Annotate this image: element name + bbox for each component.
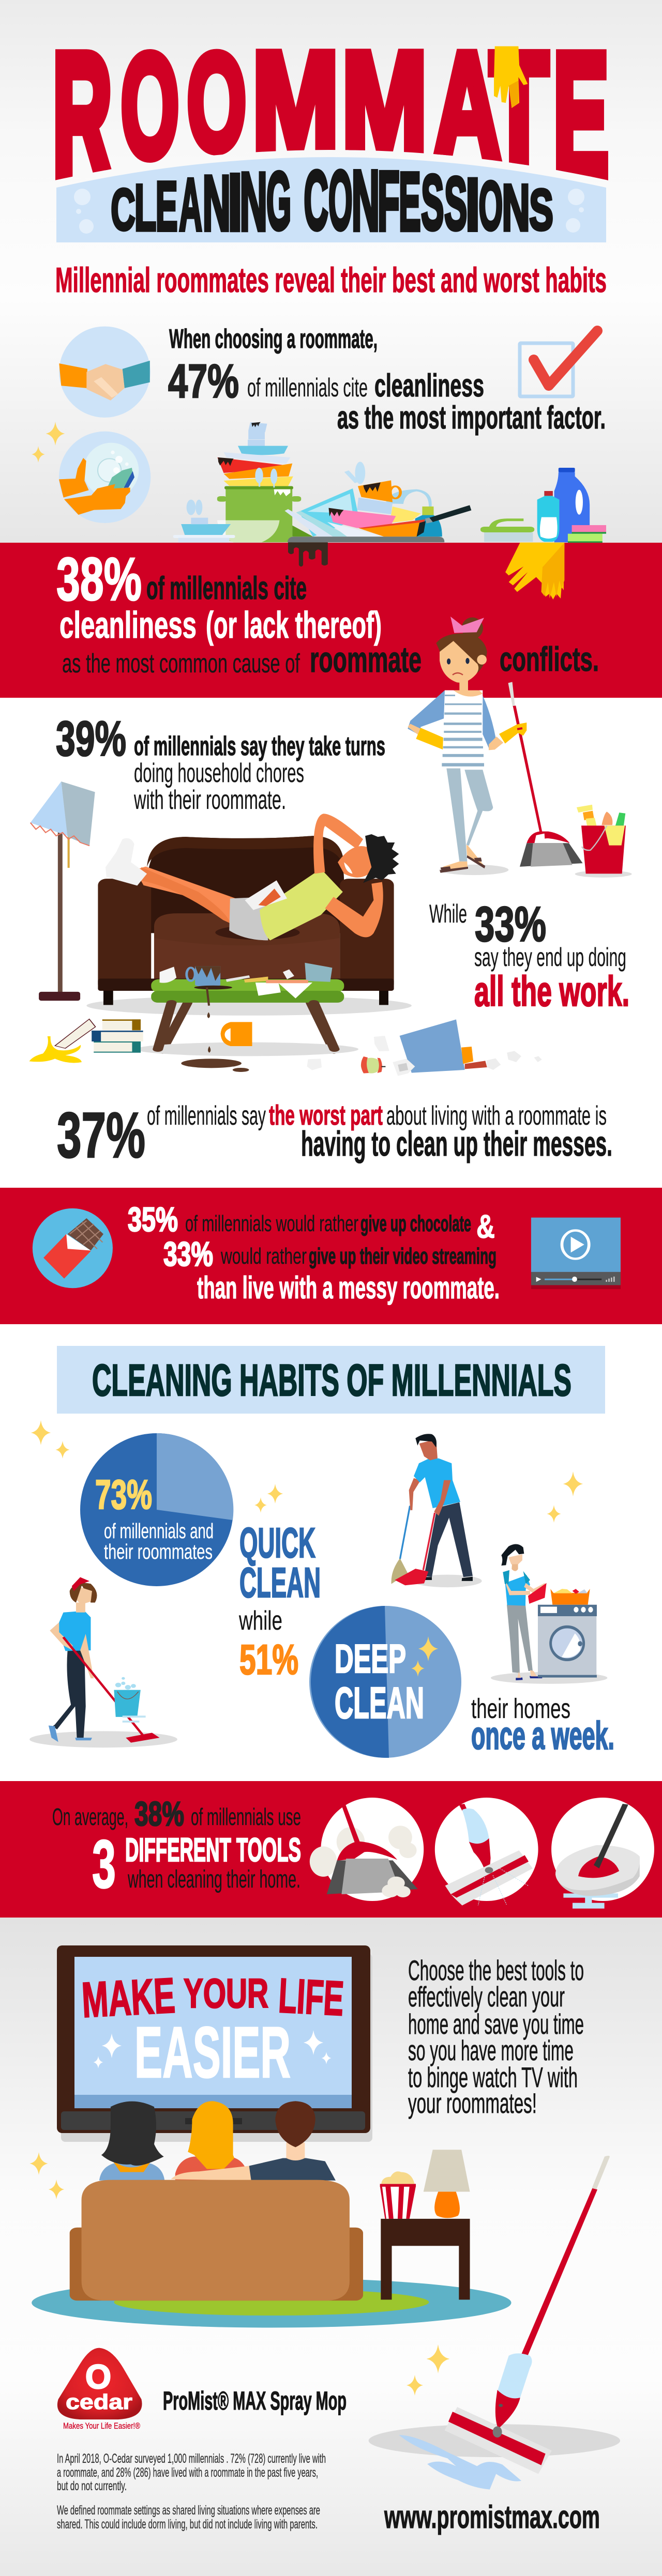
text: 3 different tools [52, 1795, 301, 1902]
text: give up chocolate: & [476, 1208, 495, 1245]
text: survey methodology: shared. This could include dorm living, but did not include living with parents. [57, 2517, 318, 2532]
text: 38% of millennials: (or lack thereof) [206, 605, 382, 646]
text: survey methodology: We defined roommate settings as shared living situations where expenses are [57, 2503, 320, 2518]
text: 37% worst part [57, 1100, 612, 1171]
icon: drip on band [288, 542, 328, 566]
illustration: annoyed woman with broom and bucket [408, 617, 632, 878]
illustration: dirty dishes pile [173, 422, 606, 543]
text: 39% take turns: doing household chores [134, 758, 304, 788]
illustration: floor lamp [31, 781, 95, 1001]
title: CLEANING CONFESSIONS: N [352, 154, 380, 249]
text: 38% of millennials: cleanliness [59, 605, 197, 646]
text: survey methodology: but do not currently. [57, 2479, 127, 2493]
title: CLEANING CONFESSIONS: N [240, 156, 267, 248]
pie chart: 73% quick clean: 73% [95, 1471, 152, 1517]
red band: chocolate and video [0, 1188, 662, 1324]
text: choose the best tools: your roommates! [408, 2087, 537, 2119]
text: choose the best tools [408, 1954, 584, 2119]
title: CLEANING CONFESSIONS: L [134, 171, 156, 244]
text: when choosing a roommate [168, 324, 606, 436]
text: 39% take turns [56, 711, 385, 815]
text: product name: ProMist® MAX Spray Mop [163, 2386, 347, 2415]
text: 39% take turns: of millennials say they take turns [134, 731, 385, 761]
text: 38% of millennials: roommate [310, 639, 422, 680]
text: survey methodology [57, 2451, 326, 2532]
red band: 3 different tools [0, 1781, 662, 1918]
icon: handshake circle [59, 326, 151, 418]
text: 38% of millennials [56, 545, 599, 680]
illustration: spray mop [369, 2156, 620, 2490]
sparkles: TV [93, 2030, 332, 2068]
icon: chocolate bar [33, 1208, 113, 1288]
illustration: TV with message [57, 1945, 372, 2142]
text: 39% take turns: 39% [56, 711, 126, 766]
heading: easier: EASIER [134, 2012, 291, 2093]
icon: broom circle [310, 1798, 424, 1901]
text: 38% of millennials: conflicts. [500, 640, 599, 678]
title: CLEANING CONFESSIONS: F [378, 154, 400, 248]
title: CLEANING CONFESSIONS: C [111, 177, 136, 242]
background: bottom section [0, 1918, 662, 2576]
icon: yellow glove hanging [505, 543, 564, 600]
background: middle white section [0, 698, 662, 1918]
text: 3 different tools: of millennials use [191, 1803, 301, 1830]
sparkles: dishes [32, 422, 65, 463]
red band: 38% conflicts [0, 543, 662, 698]
text: while 33% all the work [429, 897, 629, 1015]
heading: make your life: LIFE [277, 1968, 345, 2026]
illustration: mess on floor [29, 1003, 542, 1076]
icon: dish washing circle [59, 432, 151, 523]
icon: yellow glove on title [494, 47, 528, 108]
logo: O-Cedar: Makes Your Life Easier!® [63, 2421, 140, 2431]
text: 3 different tools: On average, [52, 1803, 128, 1830]
text: give up chocolate: 35% [128, 1200, 178, 1238]
background: top section [0, 0, 662, 543]
circle: deep clean: CLEAN [335, 1679, 424, 1728]
text: while 33% all the work: While [429, 899, 467, 928]
icon: spray mop circle [435, 1798, 538, 1906]
text: 37% worst part: the worst part [269, 1100, 383, 1131]
title: ROOMMATE: M [342, 23, 427, 180]
text: give up chocolate: 33% [163, 1235, 213, 1273]
title: ROOMMATE: A [433, 21, 501, 191]
text: 37% worst part: of millennials say [147, 1101, 266, 1131]
illustration: man sweeping [392, 1434, 482, 1587]
icon: red check mark in box [520, 331, 597, 396]
text: quick clean while 51%: CLEAN [239, 1559, 321, 1606]
icon: spin mop bucket circle [551, 1798, 654, 1909]
text: when choosing a roommate: cleanliness [374, 368, 484, 404]
title: CLEANING CONFESSIONS: S [421, 159, 444, 246]
pie chart: 73% quick clean [80, 1433, 233, 1586]
title: CLEANING CONFESSIONS: S [444, 162, 467, 246]
title: ROOMMATE: O [121, 24, 179, 188]
title: ROOMMATE: R [53, 18, 112, 214]
text: 39% take turns: with their roommate. [133, 785, 286, 815]
sparkles: habits [31, 1420, 583, 1523]
text: 38% of millennials: 38% [56, 545, 142, 614]
title: CLEANING CONFESSIONS: O [328, 154, 353, 247]
illustration: roommates on sofa [32, 2101, 511, 2328]
logo: O-Cedar [57, 2348, 142, 2431]
text: survey methodology: In April 2018, O-Cedar surveyed 1,000 millennials . 72% (728) currently live with [57, 2451, 326, 2466]
text: give up chocolate: give up their video streaming [309, 1244, 496, 1269]
icon: video player [531, 1218, 621, 1289]
text: quick clean while 51% [238, 1520, 321, 1683]
text: quick clean while 51%: while [238, 1606, 282, 1636]
title: ROOMMATE: M [252, 24, 339, 179]
title: CLEANING CONFESSIONS: N [502, 171, 530, 245]
text: their homes once a week: their homes [471, 1693, 570, 1724]
title: CLEANING CONFESSIONS: C [304, 154, 328, 248]
title: CLEANING CONFESSIONS: N [203, 160, 231, 247]
title: ROOMMATE: T [490, 20, 548, 200]
text: 38% of millennials: of millennials cite [146, 571, 307, 606]
title: CLEANING CONFESSIONS: S [529, 177, 553, 242]
text: survey methodology: a roommate, and 28% (286) have lived with a roommate in the past five years, [57, 2465, 318, 2480]
text: quick clean while 51%: QUICK [239, 1520, 315, 1567]
text: 3 different tools: 3 [92, 1826, 116, 1902]
pie chart: 73% quick clean: their roommates [104, 1540, 213, 1563]
title: CLEANING CONFESSIONS: O [479, 167, 503, 244]
circle: deep clean: DEEP [335, 1636, 406, 1681]
illustration: woman doing laundry [491, 1544, 607, 1684]
heading: make your life: MAKE [81, 1968, 176, 2028]
title: CLEANING CONFESSIONS: A [179, 164, 202, 247]
text: when choosing a roommate: of millennials cite [247, 373, 368, 402]
text: give up chocolate: give up chocolate [360, 1211, 471, 1236]
sparkles: sofa and mop [29, 2152, 449, 2396]
text: give up chocolate: would rather [220, 1244, 307, 1269]
title: CLEANING CONFESSIONS: I [228, 158, 243, 248]
heading: make your life: YOUR [184, 1970, 268, 2016]
banner: light blue arch with bubbles [56, 157, 606, 242]
illustration: man lounging on sofa [86, 814, 412, 1016]
logo: O-Cedar: O [85, 2357, 111, 2396]
pie chart: 73% quick clean: of millennials and [104, 1519, 214, 1543]
title: CLEANING CONFESSIONS: E [156, 167, 177, 246]
text: 38% of millennials: as the most common cause of [62, 649, 300, 679]
text: when choosing a roommate: When choosing a roommate, [169, 324, 378, 354]
title: CLEANING CONFESSIONS: G [266, 156, 291, 247]
heading: make your life [81, 1968, 345, 2028]
circle: deep clean [309, 1606, 461, 1758]
title: CLEANING CONFESSIONS: I [465, 163, 480, 246]
heading: cleaning habits of millennials [57, 1346, 605, 1414]
title: ROOMMATE: O [187, 25, 246, 179]
text: 3 different tools: when cleaning their home. [127, 1866, 300, 1893]
text: give up chocolate [128, 1200, 500, 1305]
text: quick clean while 51%: 51% [239, 1636, 298, 1683]
text: when choosing a roommate: 47% [168, 355, 239, 408]
text: 37% worst part: 37% [57, 1100, 145, 1171]
text: while 33% all the work: 33% [475, 897, 546, 952]
illustration: messy coffee table [151, 963, 344, 1050]
title: CLEANING CONFESSIONS: E [399, 156, 421, 248]
title: ROOMMATE [55, 49, 608, 180]
illustration: woman mopping [29, 1577, 177, 1747]
text: their homes once a week [471, 1693, 614, 1758]
text: 3 different tools: 38% [134, 1795, 184, 1833]
title: ROOMMATE: E [553, 17, 609, 214]
logo: O-Cedar: cedar [66, 2390, 132, 2414]
text: 3 different tools: DIFFERENT TOOLS [125, 1831, 301, 1868]
text: give up chocolate: of millennials would rather [185, 1211, 358, 1236]
title: CLEANING CONFESSIONS [111, 154, 553, 249]
